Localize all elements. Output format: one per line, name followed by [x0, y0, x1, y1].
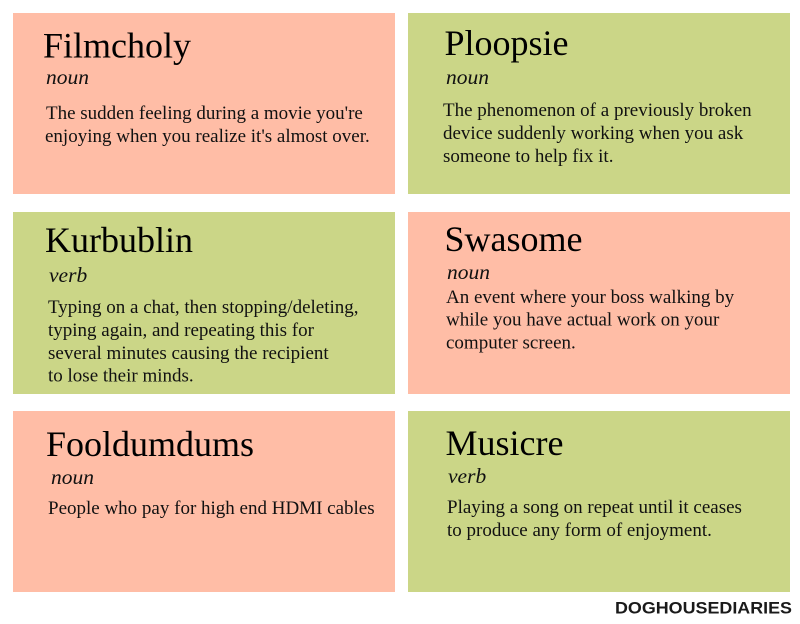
part of speech: noun: noun [447, 260, 490, 284]
definition: Swasome: while you have actual work on your [446, 310, 720, 330]
part of speech: noun: noun [446, 65, 489, 89]
definition: Musicre [447, 497, 742, 541]
definition: Kurbublin: typing again, and repeating this for [48, 320, 315, 341]
panel: Filmcholy [13, 13, 395, 194]
definition: Musicre: to produce any form of enjoyment. [447, 520, 712, 541]
definition: Filmcholy: The sudden feeling during a movie you're [46, 103, 363, 124]
panel: Ploopsie [408, 13, 790, 194]
heading: Kurbublin: Kurbublin [45, 220, 193, 260]
part of speech: noun: noun [46, 65, 89, 89]
definition: Filmcholy: enjoying when you realize it's almost over. [45, 126, 370, 147]
definition: Kurbublin: to lose their minds. [48, 366, 194, 386]
part of speech: noun: noun [51, 465, 94, 489]
part of speech: verb: verb [49, 263, 87, 287]
definition: Ploopsie: someone to help fix it. [443, 146, 613, 167]
definition: Kurbublin: Typing on a chat, then stopping/deleting, [48, 297, 359, 318]
definition: Swasome [446, 287, 735, 354]
panel: Kurbublin [13, 212, 395, 394]
definition: Kurbublin: several minutes causing the recipient [48, 343, 329, 364]
panel: Musicre [408, 411, 790, 592]
part of speech: verb: verb [448, 464, 486, 488]
heading: Filmcholy: Filmcholy [43, 26, 191, 66]
heading: Ploopsie: Ploopsie [444, 23, 569, 63]
heading: Swasome: Swasome [444, 219, 582, 259]
heading: Musicre: Musicre [446, 423, 563, 463]
definition: Swasome: computer screen. [446, 332, 576, 354]
definition: Ploopsie: device suddenly working when you ask [443, 123, 744, 144]
heading: Fooldumdums: Fooldumdums [46, 424, 254, 464]
definition: Ploopsie: The phenomenon of a previously broken [443, 100, 752, 121]
definition: Musicre: Playing a song on repeat until it ceases [447, 497, 742, 518]
definition: Filmcholy [45, 103, 370, 147]
credit: Doghouse Diaries: DOGHOUSEDIARIES [615, 598, 792, 618]
definition: Kurbublin [48, 297, 359, 386]
panel: Fooldumdums [13, 411, 395, 592]
definition: Swasome: An event where your boss walking by [446, 287, 735, 308]
definition: Fooldumdums: People who pay for high end HDMI cables [48, 498, 375, 519]
panel: Swasome [408, 212, 790, 394]
definition: Ploopsie [443, 100, 752, 167]
